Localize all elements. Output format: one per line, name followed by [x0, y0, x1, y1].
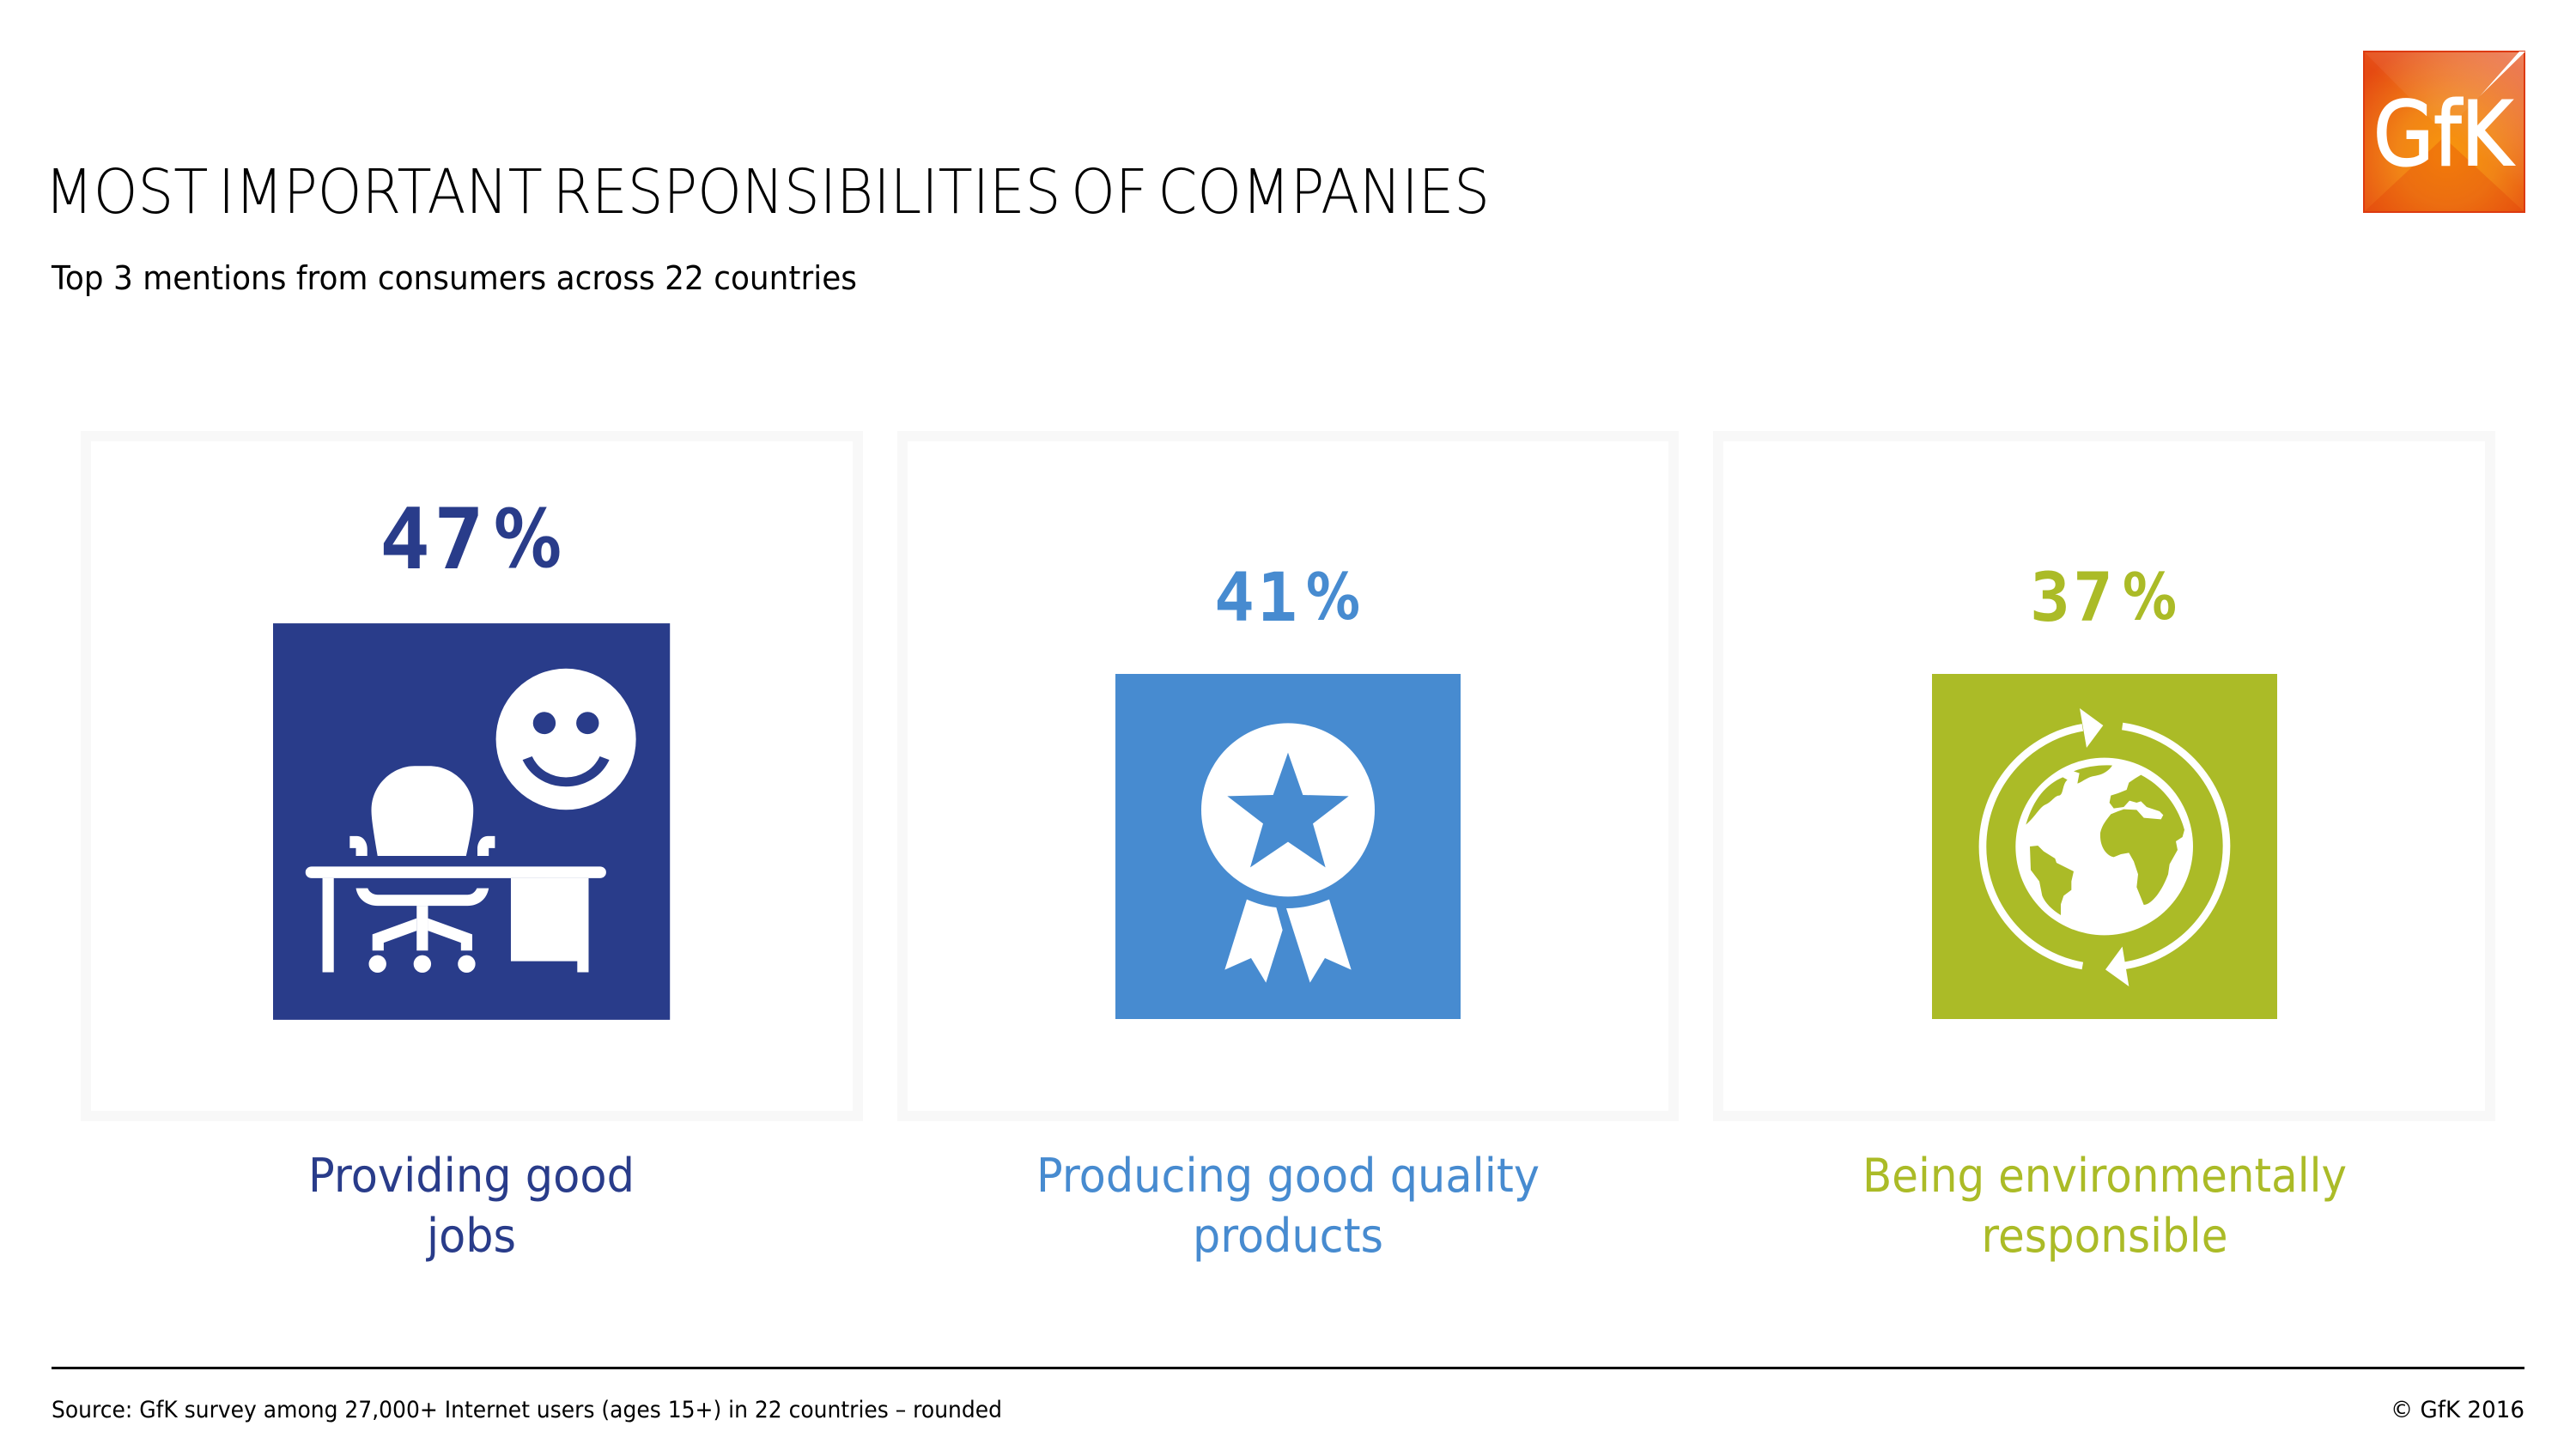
panel: providing good jobs	[86, 436, 858, 1116]
percentage: 41%: 41	[1214, 560, 1300, 637]
title: MOST IMPORTANT RESPONSIBILITIES OF COMPANIES	[45, 156, 1490, 228]
label: being environmentally responsible: Being environmentally	[1862, 1149, 2347, 1203]
panel: producing good quality products	[902, 436, 1674, 1116]
icon: desk, chair and smiley	[273, 623, 670, 1020]
subtitle: Top 3 mentions from consumers across 22 countries	[51, 259, 857, 297]
percentage: 37%	[2030, 559, 2177, 637]
percentage: 37%: %	[2123, 559, 2177, 634]
source note: Source: GfK survey among 27,000+ Internet users (ages 15+) in 22 countries – rounded	[52, 1397, 1002, 1423]
copyright: © GfK 2016	[2391, 1397, 2524, 1423]
percentage: 47%	[380, 491, 562, 589]
label: being environmentally responsible	[1862, 1149, 2347, 1263]
percentage: 47%: 47	[380, 491, 488, 589]
percentage: 37%: 37	[2030, 560, 2116, 637]
percentage: 41%: %	[1306, 559, 1360, 634]
icon: globe with circular arrows	[1932, 674, 2277, 1019]
label: providing good jobs: Providing good	[308, 1149, 635, 1203]
icon: medal with star	[1115, 674, 1461, 1019]
label: producing good quality products: Producing good quality	[1036, 1149, 1540, 1203]
percentage: 47%: %	[494, 493, 562, 586]
panel: being environmentally responsible	[1718, 436, 2490, 1116]
label: providing good jobs	[308, 1149, 635, 1263]
label: providing good jobs: jobs	[426, 1209, 516, 1263]
label: producing good quality products	[1036, 1149, 1540, 1263]
label: producing good quality products: products	[1193, 1209, 1383, 1263]
percentage: 41%	[1214, 559, 1360, 637]
logo: GfK	[2363, 51, 2525, 213]
label: being environmentally responsible: responsible	[1982, 1209, 2227, 1263]
logo: GfK: GfK	[2373, 83, 2514, 186]
